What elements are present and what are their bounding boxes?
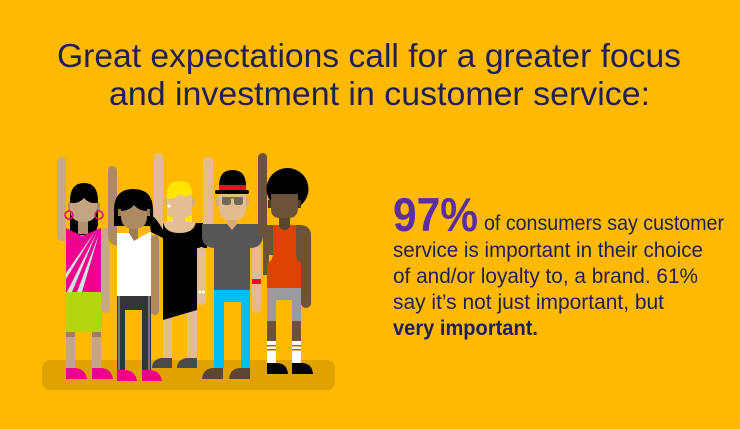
person: man with bowler hat and sunglasses: [202, 157, 263, 379]
body text: say it’s not just important, but: [393, 291, 664, 314]
body text: service is important in their choice: [393, 239, 703, 262]
sunglasses: [222, 197, 243, 205]
ground shadow: [42, 360, 335, 390]
body text: [393, 212, 724, 340]
big number: 97%: [393, 188, 478, 241]
hat: [219, 170, 246, 190]
person: woman in black dress with blonde hair: [152, 153, 207, 368]
title: [57, 37, 681, 112]
person: woman in pink sari: [57, 157, 113, 379]
wristband: [252, 279, 261, 284]
illustration: group of five people with raised arms: [42, 153, 335, 390]
person: woman in white top and striped trousers: [108, 166, 163, 381]
ponytail: [148, 213, 163, 238]
body text: of and/or loyalty to, a brand. 61%: [393, 265, 698, 288]
body text: of consumers say customer: [484, 212, 724, 235]
person: man with afro in orange vest: [258, 153, 313, 374]
socks: [267, 341, 276, 363]
title: Great expectations call for a greater focus: [57, 37, 681, 74]
statistic callout: [393, 188, 724, 340]
icon: earrings: [65, 211, 103, 219]
title: and investment in customer service:: [109, 75, 650, 112]
body text: very important.: [393, 317, 538, 340]
